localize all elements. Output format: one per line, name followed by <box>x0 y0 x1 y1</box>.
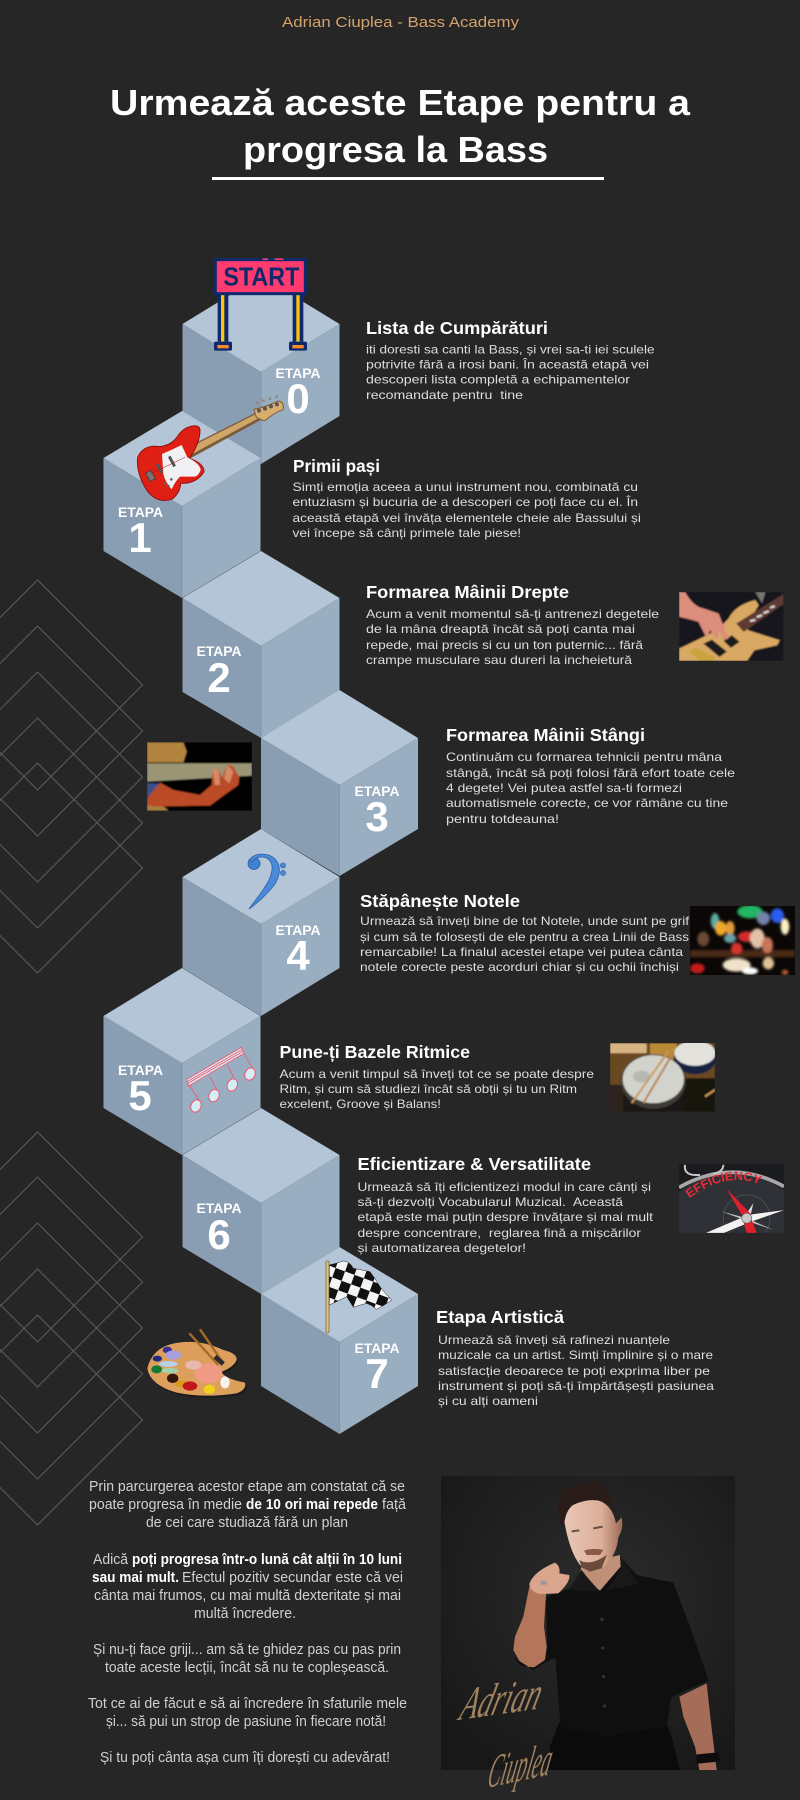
heading: Primii pași <box>293 456 380 476</box>
signature first name: Adrian <box>453 1668 549 1731</box>
panel: etapa 4 <box>182 829 795 1016</box>
closing text block: Prin parcurgerea acestor etape am constatat că se <box>89 1478 405 1495</box>
closing text block: multă încredere. <box>194 1605 296 1622</box>
icon: start sign <box>214 258 307 351</box>
body text: și cu alți oameni <box>438 1394 538 1408</box>
body text: excelent, Groove și Balans! <box>280 1097 441 1111</box>
cube label: 7 <box>365 1350 389 1397</box>
cube label: ETAPA <box>196 1201 242 1216</box>
heading: Pune-ți Bazele Ritmice <box>280 1042 470 1062</box>
body text: repede, mai precis si cu un ton puternic... fără <box>366 638 643 652</box>
portrait: Adrian Ciuplea <box>441 1476 735 1799</box>
body text: această etapă vei învăța elementele cheie ale Bassului și <box>292 511 641 525</box>
body text: despre concentrare, reglarea fină a mișcărilor <box>358 1226 641 1240</box>
shirt <box>547 1557 709 1737</box>
heading: Eficientizare & Versatilitate <box>358 1154 591 1174</box>
icon: start sign: START <box>223 261 299 291</box>
body text: și cum să te folosești de ele pentru a crea Linii de Bass <box>360 930 689 944</box>
cube label <box>196 1201 242 1258</box>
body text: satisfacție deoarece te poți exprima liber pe <box>438 1364 710 1378</box>
body text: iti doresti sa canti la Bass, și vrei sa-ti iei sculele <box>366 342 655 356</box>
photo: blurred music notes <box>690 906 795 975</box>
closing text block: sau mai mult. <box>92 1569 179 1586</box>
closing text block: Adică <box>93 1551 129 1568</box>
title <box>110 82 691 180</box>
body text <box>446 750 735 826</box>
closing text block: Tot ce ai de făcut e să ai încredere în sfaturile mele <box>88 1695 407 1712</box>
photo: efficiency compass: EFFICIENCY <box>685 1172 762 1198</box>
heading: Lista de Cumpărături <box>366 318 548 338</box>
body text <box>280 1067 594 1111</box>
closing text block <box>88 1478 407 1766</box>
photo: fretting hand <box>147 742 252 811</box>
panel: etapa 2 <box>182 551 784 738</box>
watch <box>696 1752 720 1764</box>
body text: Acum a venit momentul să-ți antrenezi degetele <box>366 607 659 621</box>
panel: etapa 0 <box>182 258 655 464</box>
buttons <box>600 1618 604 1621</box>
signature last name: Ciuplea <box>484 1733 558 1799</box>
closing text block: Și tu poți cânta așa cum îți dorești cu adevărat! <box>100 1749 390 1766</box>
cube 3 <box>261 690 418 876</box>
cube 5 <box>104 968 260 1155</box>
body text: Acum a venit timpul să înveți tot ce se poate despre <box>280 1067 594 1081</box>
photo: hand on bass <box>679 592 784 661</box>
cube label: 5 <box>128 1072 152 1119</box>
body text: recomandate pentru tine <box>366 388 523 402</box>
panel: etapa 5 <box>104 968 716 1155</box>
body text: crampe musculare sau dureri la incheietură <box>366 653 632 667</box>
cube label: ETAPA <box>118 1063 163 1078</box>
body text: vei începe să cânți primele tale piese! <box>292 526 521 540</box>
heading: Stăpânește Notele <box>360 891 520 911</box>
closing text block: Și nu-ți face griji... am să te ghidez pas cu pas prin <box>93 1641 401 1658</box>
body text: descoperi lista completă a echipamentelor <box>366 372 630 386</box>
panel: etapa 6 <box>182 1108 784 1294</box>
eyes <box>572 1527 603 1531</box>
body text: etapă este mai puțin despre învățare și mai mult <box>358 1210 654 1224</box>
sleeve <box>513 1597 558 1670</box>
cube 2 <box>182 551 340 738</box>
cube label: 6 <box>207 1211 231 1258</box>
body text <box>358 1180 654 1255</box>
cube label: ETAPA <box>276 366 321 381</box>
closing text block: de cei care studiază fără un plan <box>146 1514 348 1531</box>
body text: pentru totdeauna! <box>446 812 559 826</box>
cube label: ETAPA <box>196 644 242 659</box>
closing text block: Efectul pozitiv secundar este că vei <box>182 1569 403 1586</box>
cube 6 <box>182 1108 340 1294</box>
cube label: 2 <box>207 654 231 701</box>
fist <box>529 1563 569 1594</box>
photo: drum and sticks <box>610 1043 715 1112</box>
cube label: 4 <box>286 932 310 979</box>
body text: 4 degete! Vei putea astfel sa-ti formezi <box>446 781 682 795</box>
body text: să-ți dezvolți Vocabularul Muzical. Această <box>358 1195 623 1209</box>
collar <box>568 1555 638 1592</box>
right forearm <box>679 1683 717 1770</box>
cube label <box>354 784 400 840</box>
body text: și automatizarea degetelor! <box>358 1241 526 1255</box>
heading: Formarea Mâinii Stângi <box>446 725 645 745</box>
cube 7 <box>261 1247 418 1434</box>
body text <box>366 607 659 667</box>
cube 0 <box>182 276 340 464</box>
cube label <box>118 1063 163 1119</box>
icon: bass clef <box>248 854 286 909</box>
closing text block: cânta mai frumos, cu mai multă dexteritate și mai <box>94 1587 401 1604</box>
cube label: ETAPA <box>276 923 321 938</box>
icon: red bass guitar <box>137 395 283 500</box>
body text <box>360 914 690 974</box>
decorative diamonds: lower group <box>0 1132 142 1525</box>
cube label <box>118 505 163 561</box>
panel: etapa 3 <box>147 690 735 876</box>
title: Urmează aceste Etape pentru a <box>110 82 691 123</box>
heading: Formarea Mâinii Drepte <box>366 582 569 602</box>
body text: Urmează să înveți bine de tot Notele, unde sunt pe grif <box>360 914 690 928</box>
closing text block: poate progresa în medie <box>89 1496 242 1513</box>
body text: remarcabile! La finalul acestei etape vei putea cânta <box>360 945 683 959</box>
decorative diamonds: upper group <box>0 580 142 973</box>
cube label: 3 <box>365 793 389 840</box>
hair <box>558 1482 617 1527</box>
title: progresa la Bass <box>243 129 548 170</box>
body text: Simți emoția aceea a unui instrument nou, combinată cu <box>292 480 638 494</box>
icon: beamed notes <box>187 1047 257 1114</box>
cube label <box>276 923 321 979</box>
body text: Continuăm cu formarea tehnicii pentru mâna <box>446 750 722 764</box>
body text <box>292 480 641 540</box>
cube label <box>276 366 321 422</box>
photo: efficiency compass <box>679 1164 784 1233</box>
cube label <box>196 644 242 701</box>
body text: notele corecte peste acorduri chiar și cu ochii închiși <box>360 960 679 974</box>
body text: muzicale ca un artist. Simți împlinire și o mare <box>438 1348 713 1362</box>
face <box>563 1499 622 1570</box>
body text: stângă, încât să poți folosi fără efort toate cele <box>446 766 735 780</box>
body text: Urmează să înveți să rafinezi nuanțele <box>438 1333 670 1347</box>
body text: instrument și poți să-ți împărtășești pasiunea <box>438 1379 714 1393</box>
cube label: ETAPA <box>354 1341 400 1356</box>
brand header: Adrian Ciuplea - Bass Academy <box>282 14 520 31</box>
icon: paint palette <box>147 1329 247 1398</box>
trousers <box>548 1722 680 1770</box>
panel: etapa 1 <box>104 395 641 598</box>
body text: Ritm, și cum să studiezi încât să obții și tu un Ritm <box>280 1082 577 1096</box>
cube 4 <box>182 829 340 1016</box>
cube label <box>354 1341 400 1397</box>
body text: automatismele corecte, ce vor rămâne cu tine <box>446 796 728 810</box>
neck <box>580 1555 621 1591</box>
body text: de la mâna dreaptă încât să poți canta mai <box>366 622 635 636</box>
cube 1 <box>104 411 260 598</box>
body text: Urmează să îți eficientizezi modul in care cânți și <box>358 1180 651 1194</box>
body text: entuziasm și bucuria de a descoperi ce poți face cu el. În <box>292 494 638 509</box>
raised arm <box>513 1587 547 1668</box>
body text <box>366 342 655 402</box>
closing text block: poți progresa într-o lună cât alții în 10 luni <box>132 1551 402 1568</box>
closing text block: de 10 ori mai repede <box>246 1496 378 1513</box>
beard <box>579 1555 607 1572</box>
cube label: ETAPA <box>118 505 163 520</box>
cube label: 1 <box>128 514 152 561</box>
cube label: ETAPA <box>354 784 400 799</box>
panel: etapa 7 <box>147 1247 714 1434</box>
cube label: 0 <box>286 375 310 422</box>
closing text block: și... să pui un strop de pasiune în fiecare notă! <box>106 1713 386 1730</box>
heading: Etapa Artistică <box>436 1307 564 1327</box>
body text <box>438 1333 714 1408</box>
body text: potrivite fără a irosi bani. În această etapă vei <box>366 356 649 372</box>
closing text block: față <box>382 1496 407 1513</box>
icon: checkered flag <box>326 1261 392 1333</box>
closing text block: toate aceste lecții, încât să nu te copleșească. <box>105 1659 389 1676</box>
